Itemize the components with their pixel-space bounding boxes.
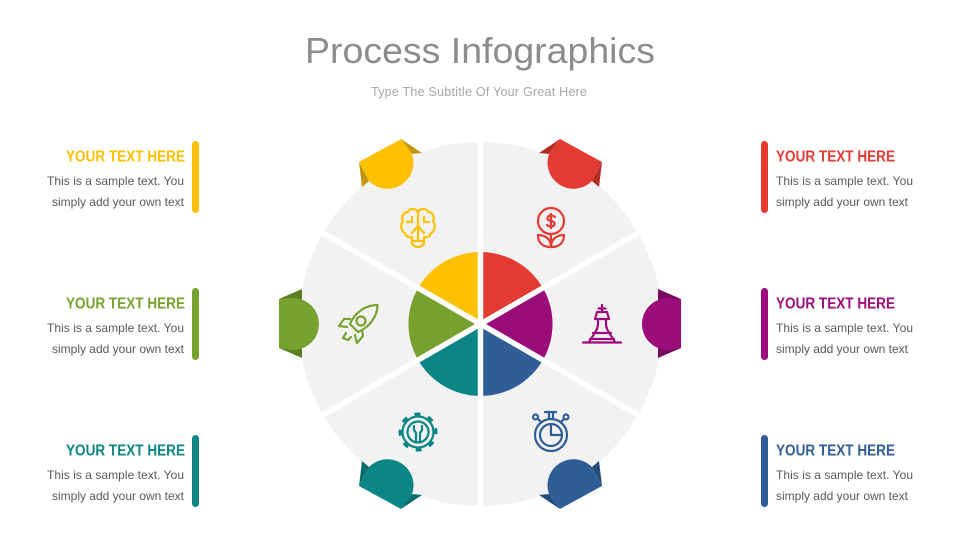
accent bar [761,141,768,213]
icon: stopwatch [533,412,568,451]
callout: teal left bottom [47,435,199,507]
heading: YOUR TEXT HERE [66,296,185,312]
body text: This is a sample text. You [47,468,184,482]
central wheel [298,138,662,510]
heading: YOUR TEXT HERE [776,442,895,460]
accent bar [761,435,768,507]
accent bar [192,435,199,507]
tab: red [539,139,602,189]
accent bar [192,288,199,360]
title: Process Infographics [305,30,655,71]
heading: YOUR TEXT HERE [66,442,185,460]
callout: purple right middle [761,288,913,360]
tab: yellow [359,139,422,189]
pie segment purple [480,288,553,360]
callout: red right top [761,141,913,213]
icon: rocket [339,305,378,343]
callout: yellow left top [47,141,199,213]
heading: YOUR TEXT HERE [776,296,895,312]
pie segment blue [480,324,543,396]
tab: purple [642,289,681,358]
body text: simply add your own text [776,489,909,503]
body text: simply add your own text [52,195,185,209]
icon: chess king [583,305,621,342]
pie segment green [408,288,480,360]
body text: simply add your own text [776,342,909,356]
pie segment yellow [418,252,480,324]
wheel background [298,142,662,506]
body text: This is a sample text. You [47,321,184,335]
body text: simply add your own text [52,342,185,356]
callout: green left middle [47,288,199,360]
tab: green [279,289,319,358]
body text: This is a sample text. You [47,174,184,188]
tab: blue [539,459,602,509]
accent bar [192,141,199,213]
heading: YOUR TEXT HERE [66,148,185,166]
body text: This is a sample text. You [776,321,913,335]
pie segment red [480,252,543,324]
subtitle: Type The Subtitle Of Your Great Here [371,85,587,99]
heading: YOUR TEXT HERE [776,148,895,166]
body text: simply add your own text [776,195,909,209]
icon: gear with wrench [397,411,439,453]
body text: This is a sample text. You [776,174,913,188]
pie segment teal [418,324,480,396]
icon: brain light bulb [401,209,435,247]
tab: teal [359,459,422,509]
accent bar [761,288,768,360]
callout: blue right bottom [761,435,913,507]
icon: money flower [538,208,564,247]
body text: simply add your own text [52,489,185,503]
body text: This is a sample text. You [776,468,913,482]
